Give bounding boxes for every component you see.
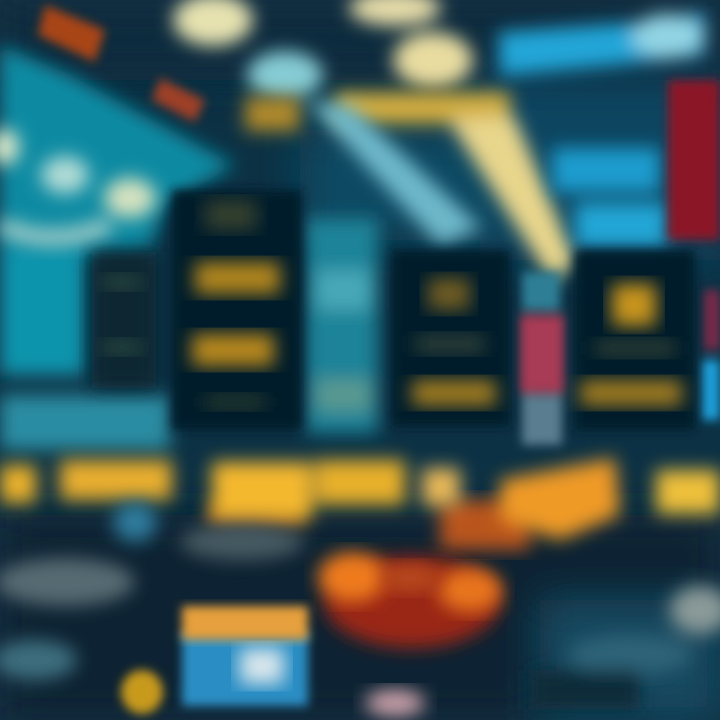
panel: dark card right [575, 250, 695, 430]
top cream lamps [173, 0, 473, 99]
red banner top right [668, 80, 720, 240]
orange glow under lit row [210, 500, 530, 550]
top left orange tags [38, 5, 205, 122]
pink column [520, 272, 720, 445]
panel: dark card centre [392, 250, 510, 426]
gold coin [121, 670, 163, 714]
decorative lights on left [0, 129, 156, 238]
pink glow at bottom [365, 689, 425, 717]
blue card with orange header [182, 606, 308, 706]
blue signs on the right [498, 12, 705, 247]
panel: upper left teal band [0, 45, 235, 450]
gold beam and cone [245, 92, 576, 282]
grey shelves [0, 502, 720, 710]
panel: dark card with gold lines [172, 190, 302, 430]
light blue diagonal beam [305, 100, 482, 246]
yellow lit row [0, 458, 720, 540]
red and orange centre object [318, 552, 502, 648]
panel: small dark card [92, 252, 156, 388]
teal column [306, 218, 378, 433]
